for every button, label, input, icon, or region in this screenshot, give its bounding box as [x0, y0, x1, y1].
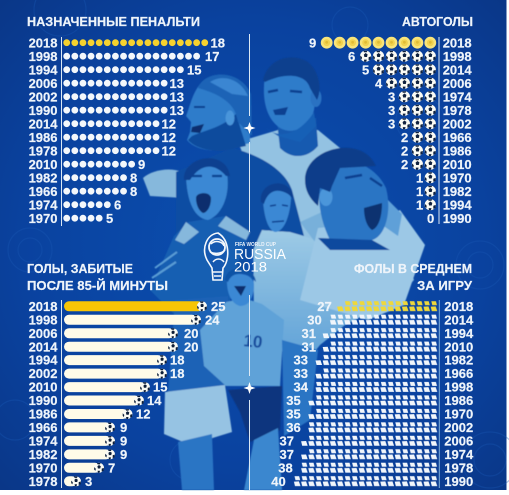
row 1982	[416, 184, 472, 199]
row 2010: 2010	[444, 339, 473, 354]
bar 2010	[29, 380, 167, 395]
row 2018: 18	[210, 35, 225, 50]
row 2002	[29, 89, 184, 104]
row 1970	[29, 211, 113, 226]
row 1974: 1974	[29, 197, 58, 212]
row 1998: 17	[205, 49, 219, 64]
row 1982: 1982	[29, 170, 58, 185]
row 1978: 3	[388, 103, 395, 118]
row 1966	[29, 184, 137, 199]
row 1978: 1978	[443, 103, 472, 118]
row 2018: 2018	[29, 35, 58, 50]
row 1990: 13	[170, 103, 184, 118]
bar 1990	[29, 393, 162, 408]
row 2014	[362, 62, 472, 77]
row 2014	[307, 312, 474, 327]
bar 1986: 1986	[29, 407, 58, 422]
row 1970	[416, 170, 472, 185]
row 1970: 5	[106, 211, 113, 226]
row 1990	[427, 211, 472, 226]
bar 2018: 2018	[29, 299, 58, 314]
row 1974: 6	[114, 197, 121, 212]
row 2014: 2014	[444, 312, 474, 327]
bar 1986	[29, 407, 150, 422]
row 1998: 1998	[29, 49, 58, 64]
row 2006	[280, 434, 473, 448]
row 2002: 36	[286, 420, 301, 435]
row 2006: 2006	[444, 434, 473, 448]
row 2010: 9	[138, 157, 145, 172]
row 2018: 27	[317, 299, 332, 314]
bar 2018	[29, 299, 225, 314]
panel: goals after 85th minute	[27, 262, 225, 489]
bar 1982	[29, 447, 127, 462]
panel: own goals	[309, 15, 473, 226]
row 2018	[29, 35, 225, 50]
row 1978	[278, 460, 473, 475]
heading: goals after 85th minute: ПОСЛЕ 85-Й МИНУТЫ	[27, 278, 168, 293]
row 1986: 1986	[444, 393, 473, 408]
row 2010: 31	[302, 339, 316, 354]
row 1978: 1978	[29, 143, 58, 158]
row 1970: 35	[286, 407, 301, 422]
row 1974	[388, 89, 472, 104]
row 1986: 2	[401, 143, 408, 158]
bar 1998: 1998	[29, 312, 58, 327]
shirt number: 10	[243, 331, 263, 352]
bar 2014: 20	[184, 339, 198, 354]
bar 1970: 7	[108, 460, 115, 475]
bar 1978: 3	[85, 474, 92, 489]
bar 2002	[29, 366, 184, 381]
row 2006: 13	[170, 76, 184, 91]
row 1990: 1990	[444, 474, 473, 489]
bar 1998	[29, 312, 220, 327]
row 1994	[29, 62, 201, 77]
player: Griezmann and lower right shirt	[253, 212, 414, 370]
player: Coutinho	[300, 148, 425, 320]
row 1998: 34	[294, 380, 309, 395]
bar 2018: 25	[211, 299, 225, 314]
row 1998: 1998	[443, 49, 472, 64]
row 2014: 30	[307, 312, 322, 327]
row 2010	[302, 339, 473, 354]
bar 2006: 2006	[29, 326, 58, 341]
logo: FIFA World Cup Russia 2018: 2018	[234, 260, 267, 274]
bar 1974	[29, 434, 127, 448]
row 1986	[29, 130, 176, 145]
row 1970: 1970	[443, 170, 472, 185]
row 1978: 38	[278, 460, 293, 475]
row 2006	[29, 76, 184, 91]
row 1990: 1990	[29, 103, 58, 118]
bar 1974: 9	[120, 434, 127, 448]
row 1994: 1	[416, 197, 423, 212]
player photos montage	[143, 57, 425, 490]
bar 1974: 1974	[29, 434, 58, 448]
logo: FIFA World Cup Russia 2018: RUSSIA	[234, 246, 286, 263]
row 2014	[29, 116, 176, 131]
row 2002: 2002	[29, 89, 58, 104]
bar 1986: 12	[136, 407, 150, 422]
row 1966	[294, 366, 473, 381]
centre axis lines	[244, 34, 256, 490]
player: Ronaldo	[238, 57, 345, 270]
row 1966: 33	[294, 366, 308, 381]
player: Kane	[143, 74, 304, 280]
row 1970: 1	[416, 170, 423, 185]
row 1994: 1994	[443, 197, 472, 212]
row 1990: 1990	[443, 211, 472, 226]
row 2018: 2018	[443, 35, 472, 50]
player: Cheryshev	[150, 158, 250, 320]
player: Griezmann head	[261, 183, 293, 232]
row 2018	[317, 299, 473, 314]
row 1990: 40	[271, 474, 286, 489]
row 1978	[29, 143, 176, 158]
row 1974: 3	[388, 89, 395, 104]
row 2018: 9	[309, 35, 316, 50]
row 1990	[271, 474, 473, 489]
row 2010	[29, 157, 145, 172]
row 1998: 1998	[444, 380, 473, 395]
heading: goals after 85th minute: ГОЛЫ, ЗАБИТЫЕ	[27, 262, 133, 276]
row 2010	[401, 157, 472, 172]
row 1966: 1966	[444, 366, 473, 381]
row 1998	[294, 380, 473, 395]
row 2014: 5	[362, 62, 369, 77]
row 2002: 3	[388, 116, 395, 131]
bar 2006	[29, 326, 198, 341]
row 1966: 1966	[443, 130, 472, 145]
row 2002	[388, 116, 472, 131]
row 1982: 1	[416, 184, 423, 199]
heading: penalties: НАЗНАЧЕННЫЕ ПЕНАЛЬТИ	[27, 15, 200, 29]
row 2014: 2014	[29, 116, 58, 131]
row 1994: 15	[187, 62, 201, 77]
bar 1982: 1982	[29, 447, 58, 462]
row 1982	[29, 170, 137, 185]
row 1994	[302, 326, 474, 341]
bar 1978: 1978	[29, 474, 58, 489]
row 1982: 1982	[444, 353, 473, 368]
logo: FIFA World Cup Russia 2018: FIFA WORLD CUP	[235, 242, 276, 248]
row 2006	[375, 76, 472, 91]
bar 1966	[29, 420, 127, 435]
row 2002: 13	[170, 89, 184, 104]
bar 2010: 15	[153, 380, 167, 395]
bar 1970: 1970	[29, 460, 58, 475]
bar 1982: 9	[120, 447, 127, 462]
bar 2014	[29, 339, 198, 354]
row 1986: 35	[286, 393, 301, 408]
row 1966: 2	[401, 130, 408, 145]
bar 1998: 24	[205, 312, 220, 327]
row 1986	[401, 143, 472, 158]
bar 1978	[29, 474, 92, 489]
heading: average fouls per game	[354, 262, 472, 293]
bar 1990: 1990	[29, 393, 58, 408]
row 1990	[29, 103, 184, 118]
row 1986: 12	[162, 130, 176, 145]
row 1990: 0	[427, 211, 434, 226]
heading: own goals: АВТОГОЛЫ	[402, 15, 473, 29]
row 1974: 1974	[444, 447, 474, 462]
player: left figure with shorts	[164, 296, 232, 490]
row 2002: 2002	[443, 116, 472, 131]
row 1994: 1994	[444, 326, 474, 341]
heading: average fouls per game: ФОЛЫ В СРЕДНЕМ	[354, 262, 472, 276]
row 2006: 4	[375, 76, 383, 91]
icon: trophy	[205, 233, 228, 280]
player: Hazard	[200, 268, 318, 490]
row 1974	[280, 447, 474, 462]
row 1970	[286, 407, 473, 422]
panel: average fouls per game	[271, 262, 474, 489]
row 1982: 33	[294, 353, 308, 368]
row 2006: 37	[280, 434, 294, 448]
row 2010: 2	[401, 157, 408, 172]
row 1982: 1982	[443, 184, 472, 199]
bar 2002: 2002	[29, 366, 58, 381]
row 2014: 2014	[443, 62, 472, 77]
bar 1966: 1966	[29, 420, 58, 435]
row 1978: 1978	[444, 460, 473, 475]
row 2018	[309, 35, 472, 50]
row 1986: 1986	[443, 143, 472, 158]
row 2006: 2006	[29, 76, 58, 91]
row 1986	[286, 393, 473, 408]
row 1966: 1966	[29, 184, 58, 199]
row 1974	[29, 197, 121, 212]
bar 1994: 1994	[29, 353, 58, 368]
row 1978: 12	[162, 143, 176, 158]
row 1974: 37	[280, 447, 294, 462]
logo: FIFA World Cup Russia 2018	[205, 233, 286, 280]
row 1994	[416, 197, 472, 212]
row 2014: 12	[162, 116, 176, 131]
row 1970: 1970	[29, 211, 58, 226]
row 1982: 8	[130, 170, 137, 185]
bar 2014: 2014	[29, 339, 58, 354]
row 1994: 31	[302, 326, 316, 341]
bar 2010: 2010	[29, 380, 58, 395]
bar 2002: 18	[170, 366, 184, 381]
row 1998	[348, 49, 472, 64]
row 1970: 1970	[444, 407, 473, 422]
bar 1994: 18	[170, 353, 184, 368]
row 2002: 2002	[444, 420, 473, 435]
bar 1990: 14	[147, 393, 162, 408]
row 1966: 8	[130, 184, 137, 199]
row 1994: 1994	[29, 62, 58, 77]
heading: average fouls per game: ЗА ИГРУ	[417, 279, 472, 293]
row 1978	[388, 103, 472, 118]
panel: penalties	[27, 15, 225, 226]
row 1986: 1986	[29, 130, 58, 145]
bar 1994	[29, 353, 184, 368]
row 1974: 1974	[443, 89, 472, 104]
bar 1966: 9	[120, 420, 127, 435]
row 2010: 2010	[443, 157, 472, 172]
row 2010: 2010	[29, 157, 58, 172]
row 1998	[29, 49, 219, 64]
row 1998: 6	[348, 49, 355, 64]
heading: goals after 85th minute	[27, 262, 168, 293]
row 1966	[401, 130, 472, 145]
row 2002	[286, 420, 473, 435]
row 2006: 2006	[443, 76, 472, 91]
bar 2006: 20	[184, 326, 198, 341]
row 1982	[294, 353, 473, 368]
row 2018: 2018	[444, 299, 473, 314]
bar 1970	[29, 460, 115, 475]
